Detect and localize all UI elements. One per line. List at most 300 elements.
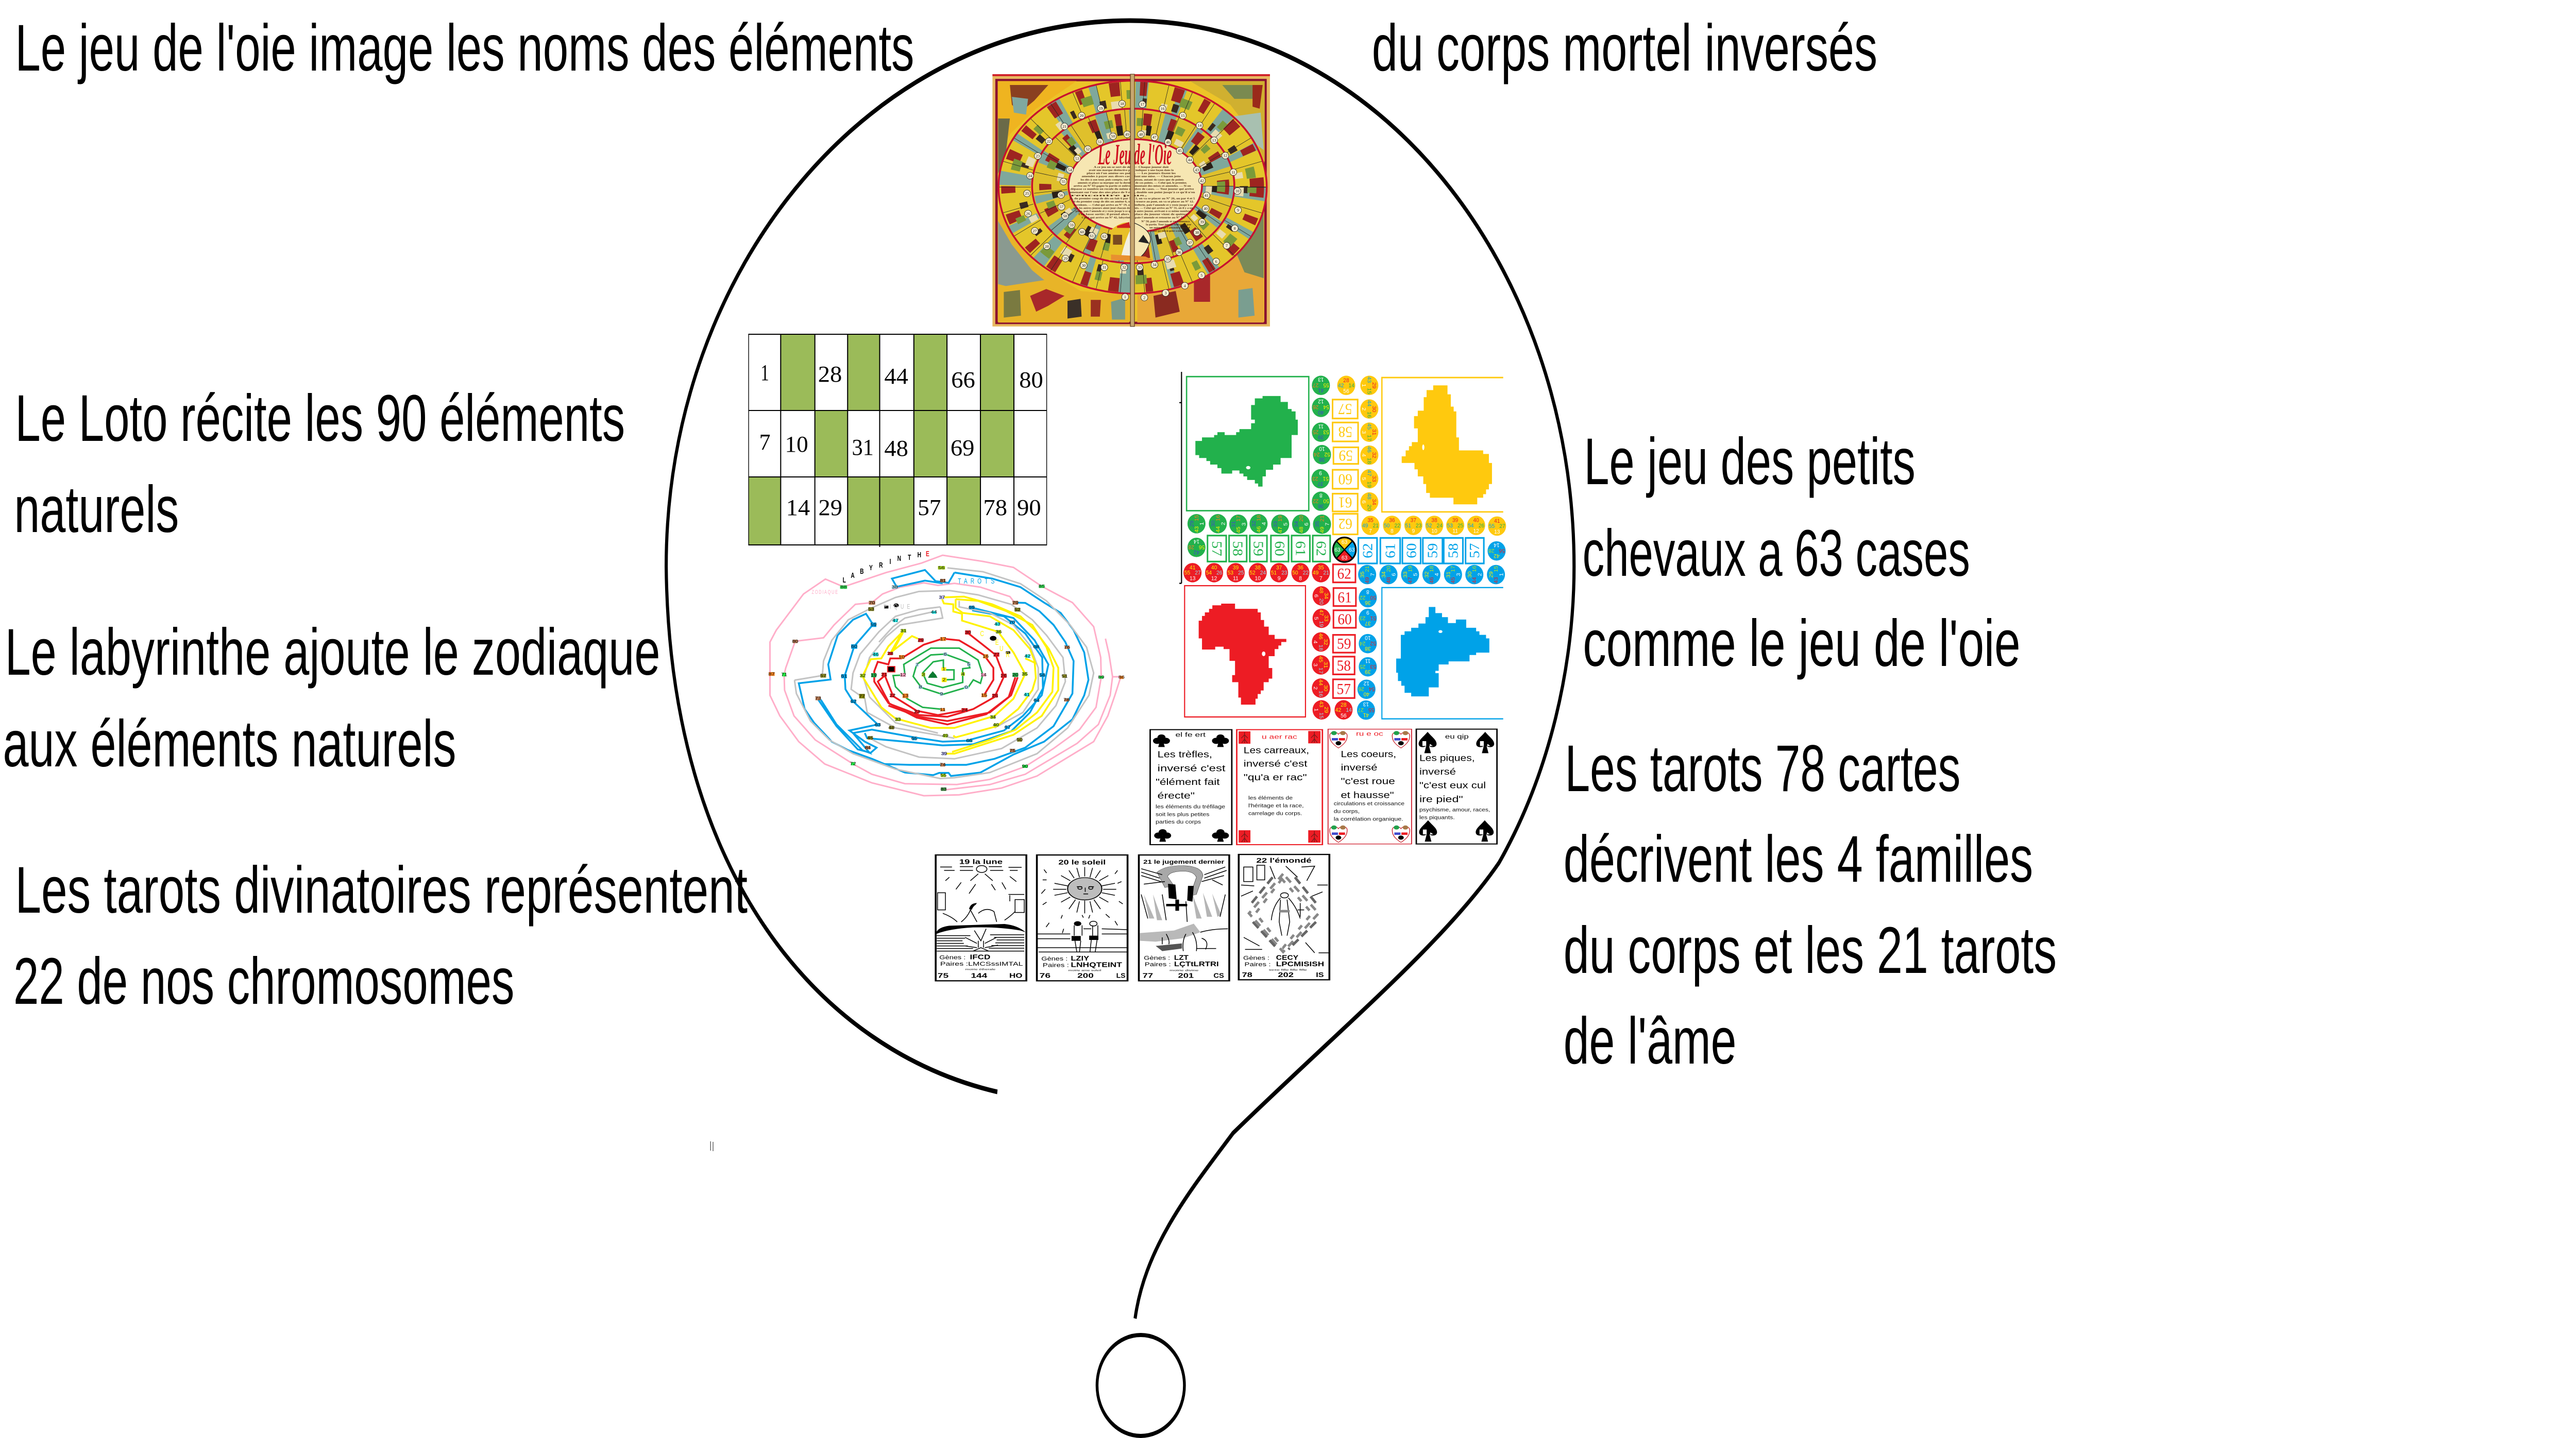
émondé illustration: [1241, 865, 1329, 953]
green tokens: 25: [1313, 429, 1318, 435]
text: jeu de l'oie right: du corps mortel inversés: [1372, 12, 1877, 85]
tarot cards: [936, 854, 1329, 981]
green tokens: 27: [1313, 382, 1318, 388]
board numbered spaces: 30: [1081, 263, 1086, 268]
yellow tokens: 43: [1366, 376, 1372, 383]
labyrinth markers: 11: [940, 708, 945, 712]
board numbered spaces: 19: [1099, 106, 1103, 111]
red tokens: 33: [1323, 615, 1329, 622]
green tokens: 48: [1298, 527, 1304, 533]
blue tokens: 55: [1368, 707, 1374, 713]
green tokens: 18: [1256, 515, 1262, 521]
tarot 20 le soleil: Gènes :: [1041, 956, 1067, 962]
labyrinth markers: 64: [1033, 698, 1040, 703]
labyrinth markers: 67: [1005, 725, 1011, 730]
tarot 21 le jugement dernier: Gènes :: [1144, 955, 1170, 961]
tarot 21 le jugement dernier: 21 le jugement dernier: [1143, 859, 1225, 865]
yellow tokens: [1337, 375, 1506, 536]
card: coeurs: inversé: [1341, 763, 1377, 773]
tarot 21 le jugement dernier: moirie divine: [1170, 969, 1199, 972]
blue numbered squares: [1359, 538, 1484, 563]
blue tokens: 54: [1369, 686, 1375, 692]
blue tokens: 22: [1360, 594, 1365, 601]
card: carreaux: Les carreaux,: [1244, 746, 1309, 756]
labyrinth markers: 62: [850, 699, 857, 704]
board numbered spaces: 46: [1166, 140, 1170, 145]
corner landscape: top right: [1190, 81, 1265, 162]
suit cards: [1150, 729, 1497, 845]
green home: [1187, 376, 1309, 511]
labyrinth markers: 14: [980, 673, 987, 677]
tarot 22 l'émondé: LPCMISISH: [1276, 960, 1324, 968]
green tokens: 39: [1318, 434, 1324, 440]
yellow tokens: 34: [1371, 499, 1377, 505]
green tokens: 43: [1194, 526, 1200, 533]
text: jeu de l'oie left: Le jeu de l'oie image les noms des éléments: [15, 12, 914, 85]
green tokens: 8: [1319, 492, 1323, 499]
labyrinth markers: 7: [916, 663, 919, 667]
yellow numbered squares: 58: [1338, 423, 1352, 440]
labyrinth markers: 37: [939, 595, 945, 600]
blue tokens: 13: [1363, 701, 1369, 707]
board numbered spaces: 18: [1120, 101, 1124, 106]
labyrinth markers: 47: [892, 619, 899, 623]
green tokens: 23: [1312, 475, 1318, 482]
red tokens: 50: [1292, 570, 1298, 576]
card: carreaux: [1237, 730, 1323, 845]
outer ring of squares: [1008, 89, 1257, 286]
red tokens: 6: [1313, 594, 1319, 597]
card: trèfles: érecte": [1158, 791, 1195, 801]
red numbered squares: 61: [1337, 589, 1352, 606]
yellow tokens: 32: [1371, 452, 1377, 458]
labyrinth markers: 89: [1098, 675, 1105, 680]
blue tokens: 25: [1360, 663, 1365, 670]
card: carreaux: les éléments de: [1248, 795, 1293, 801]
yellow tokens: 1: [1361, 384, 1367, 387]
green tokens: 4: [1261, 522, 1267, 525]
board numbered spaces: 10: [1235, 189, 1240, 194]
red tokens: 20: [1318, 598, 1324, 605]
red tokens: 35: [1318, 564, 1324, 571]
board numbered spaces: 58: [1063, 214, 1067, 218]
green tokens: 12: [1318, 398, 1324, 405]
red tokens: 44: [1318, 679, 1324, 686]
yellow tokens: 16: [1366, 412, 1372, 418]
yellow tokens: 47: [1366, 470, 1372, 476]
tarot 21 le jugement dernier: 77: [1143, 971, 1153, 979]
tarot 19 la lune: 19 la lune: [959, 858, 1003, 866]
tarot 20 le soleil: LNHQTEINT: [1071, 961, 1122, 969]
green tokens: 29: [1189, 521, 1195, 527]
yellow tokens: 20: [1366, 505, 1372, 511]
green numbered squares: 62: [1313, 541, 1329, 556]
yellow tokens: 49: [1362, 522, 1368, 529]
card: piques: "c'est eux cul: [1419, 781, 1486, 791]
labyrinth markers: 0: [964, 685, 968, 690]
blue tokens: 27: [1358, 707, 1364, 713]
green tokens: 21: [1319, 516, 1325, 522]
labyrinth markers: 17: [940, 637, 946, 642]
green tokens: 51: [1323, 475, 1329, 482]
red tokens: 8: [1299, 575, 1302, 582]
red tokens: 7: [1319, 575, 1323, 582]
board numbered spaces: 42: [1200, 178, 1204, 183]
labyrinth markers: 43: [994, 622, 1001, 627]
blue tokens: 24: [1360, 640, 1365, 646]
heart icons: [1330, 731, 1410, 843]
loto numbers: 14: [786, 495, 810, 521]
red tokens: 13: [1190, 575, 1195, 582]
green numbered squares: 60: [1272, 541, 1287, 556]
board numbered spaces: 12: [1223, 153, 1227, 158]
thought bubble outline: [666, 21, 1574, 1319]
yellow numbered squares: 62: [1338, 515, 1352, 532]
green numbered squares: 61: [1293, 541, 1308, 556]
yellow tokens: 40: [1473, 517, 1479, 524]
text: petits chevaux: [1583, 425, 2021, 680]
red tokens: 23: [1281, 570, 1287, 576]
blue tokens: 31: [1446, 571, 1451, 578]
blue tokens: 20: [1386, 566, 1392, 572]
labyrinth markers: 57: [820, 674, 826, 678]
green tokens: 53: [1323, 429, 1329, 435]
labyrinth word: COEUR: C: [980, 629, 984, 638]
board rules paragraph: que les autres joueurs aient joué chacun deux fois. — Celui qui arrive au N° 31, où il y a un: [1074, 206, 1193, 210]
blue tokens: 50: [1370, 594, 1376, 601]
labyrinth markers: [769, 566, 1125, 792]
board numbered spaces: 33: [1138, 265, 1142, 270]
red tokens: 10: [1255, 575, 1261, 582]
card: trèfles: Les trèfles,: [1158, 750, 1212, 760]
yellow tokens: 24: [1437, 522, 1443, 529]
red tokens: 31: [1323, 662, 1329, 668]
small bubble circle: [1097, 1335, 1184, 1436]
tarot 22 l'émondé: CECY: [1276, 953, 1299, 961]
card: carreaux: "qu'a er rac": [1244, 773, 1307, 782]
blue tokens: 43: [1493, 577, 1499, 584]
loto numbers: 7: [759, 430, 770, 455]
loto numbers: 31: [852, 435, 874, 460]
stray tick marks: [710, 1141, 713, 1151]
board numbered spaces: 56: [1059, 193, 1063, 197]
board numbered spaces: 1: [1124, 295, 1126, 299]
text: tarots 78 cartes: du corps et les 21 tarots: [1564, 914, 2057, 987]
red tokens: 55: [1184, 570, 1190, 576]
red tokens: 24: [1260, 570, 1266, 576]
labyrinth markers: 59: [870, 623, 877, 627]
tarot 22 l'émondé: 78: [1242, 971, 1252, 979]
labyrinth markers: 31: [901, 629, 907, 634]
text: labyrinthe: aux éléments naturels: [3, 708, 456, 781]
blue tokens: 8: [1366, 589, 1369, 595]
labyrinth markers: 35: [1022, 672, 1028, 677]
green tokens: 1: [1199, 522, 1205, 525]
red tokens: 46: [1318, 633, 1324, 640]
green tokens: 54: [1323, 404, 1329, 410]
green tokens: 28: [1188, 544, 1194, 550]
blue tokens: 28: [1488, 547, 1494, 554]
yellow tokens: 19: [1366, 481, 1372, 488]
red tokens: 39: [1233, 564, 1239, 571]
loto numbers: 66: [951, 367, 975, 393]
red tokens: 51: [1271, 570, 1277, 576]
blue tokens: 52: [1370, 640, 1376, 646]
labyrinth markers: 42: [1024, 654, 1031, 659]
labyrinth markers: 29: [918, 638, 924, 643]
red tokens: 48: [1318, 587, 1324, 593]
card: trèfles: [1150, 730, 1232, 845]
green tokens: 5: [1283, 523, 1289, 526]
yellow tokens: 48: [1366, 493, 1372, 500]
labyrinth markers: 8: [919, 685, 922, 690]
text: petits chevaux: comme le jeu de l'oie: [1583, 607, 2021, 680]
labyrinth markers: 88: [840, 585, 846, 590]
blue tokens: 37: [1365, 620, 1371, 626]
labyrinth markers: 33: [895, 717, 901, 722]
labyrinth markers: 77: [859, 694, 865, 699]
board numbered spaces: 17: [1140, 102, 1144, 107]
yellow tokens: 14: [1349, 383, 1354, 389]
yellow numbered squares: [1333, 400, 1359, 535]
tarot 19 la lune: 144: [971, 971, 988, 979]
tarot 19 la lune: 75: [938, 971, 949, 979]
blue tokens: 7: [1370, 573, 1376, 576]
loto numbers: 28: [818, 362, 842, 387]
green tokens: 32: [1251, 521, 1257, 527]
labyrinth markers: 27: [993, 653, 999, 657]
labyrinth word: COEUR: E: [995, 638, 999, 647]
blue tokens: 17: [1450, 566, 1456, 572]
blue tokens: 41: [1363, 712, 1369, 718]
yellow tokens: 23: [1416, 522, 1421, 529]
card: piques: eu qip: [1445, 733, 1469, 740]
labyrinth markers: 34: [990, 715, 996, 720]
board rules paragraph: rencontre plus.: [1071, 194, 1149, 197]
yellow tokens: 27: [1499, 523, 1505, 529]
labyrinth markers: 79: [1012, 601, 1019, 605]
board numbered spaces: 50: [1111, 134, 1115, 139]
red tokens: 36: [1297, 564, 1303, 571]
yellow tokens: 36: [1389, 517, 1395, 524]
labyrinth markers: 73: [815, 696, 821, 701]
red tokens: 19: [1318, 621, 1324, 627]
labyrinth markers: 68: [1033, 645, 1040, 649]
board numbered spaces: 36: [1177, 250, 1181, 254]
card: trèfles: les éléments du tréfilage: [1156, 804, 1225, 810]
board numbered spaces: 13: [1212, 138, 1216, 143]
red tokens: 43: [1318, 701, 1324, 707]
card: carreaux: l'héritage et la race,: [1248, 803, 1304, 809]
yellow tokens: 46: [1366, 447, 1372, 453]
goose vignette: [1109, 222, 1154, 261]
card: trèfles: "élément fait: [1156, 777, 1220, 787]
board numbered spaces: 47: [1153, 135, 1157, 140]
loto numbers: 69: [951, 435, 974, 461]
card: coeurs: [1328, 729, 1412, 844]
red numbered squares: 60: [1337, 611, 1352, 628]
board numbered spaces: 48: [1139, 132, 1143, 136]
labyrinth paths: [770, 555, 1121, 796]
labyrinth markers: 46: [873, 653, 879, 657]
labyrinth markers: 52: [1014, 608, 1021, 612]
labyrinth markers: 70: [869, 601, 875, 605]
blue tokens: 11: [1365, 658, 1370, 664]
moon illustration: [936, 866, 1026, 951]
labyrinth markers: 26: [1001, 674, 1007, 678]
yellow tokens: 42: [1338, 383, 1344, 389]
centre dice wheel: 63: [1349, 547, 1354, 553]
red tokens: 38: [1255, 564, 1261, 571]
yellow tokens: 29: [1371, 382, 1377, 388]
labyrinth word: LABYRINTHE: E: [926, 549, 929, 558]
board rules paragraph: un autre paie l'amende et prend: [1149, 227, 1190, 230]
blue tokens: 34: [1381, 571, 1387, 578]
text: petits chevaux: chevaux a 63 cases: [1583, 517, 1970, 590]
green tokens: 45: [1235, 527, 1242, 533]
card: coeurs: et hausse": [1341, 790, 1394, 800]
labyrinth word: COEUR: [980, 629, 1010, 659]
green tokens: 7: [1325, 523, 1331, 526]
petits chevaux board: [1179, 372, 1506, 720]
yellow tokens: 45: [1366, 423, 1372, 430]
red numbered squares: 57: [1337, 681, 1351, 698]
red tokens: 15: [1318, 712, 1324, 718]
yellow tokens: 52: [1426, 522, 1432, 529]
labyrinth markers: 22: [889, 693, 895, 698]
labyrinth markers: 80: [792, 639, 799, 644]
yellow tokens: 30: [1371, 406, 1377, 412]
board numbered spaces: 37: [1188, 241, 1192, 245]
red tokens: 1: [1313, 708, 1319, 711]
green tokens: 11: [1318, 423, 1324, 430]
labyrinth word: LABYRINTHE: H: [918, 550, 921, 559]
card: trèfles: parties du corps: [1156, 819, 1201, 825]
labyrinth markers: 48: [888, 726, 894, 730]
green numbered squares: 59: [1250, 541, 1266, 556]
text: loto: Le Loto récite les 90 éléments: [15, 382, 625, 455]
loto numbers: 29: [818, 495, 842, 521]
labyrinth markers: 60: [851, 644, 857, 649]
red tokens: 4: [1312, 640, 1318, 644]
club icons: [1153, 734, 1229, 842]
board numbered spaces: 44: [1188, 158, 1192, 162]
red tokens: 41: [1190, 564, 1195, 571]
labyrinth markers: 4: [961, 672, 965, 677]
green tokens: 47: [1278, 527, 1283, 533]
card: piques: psychisme, amour, races,: [1419, 807, 1490, 813]
blue tokens: 16: [1471, 566, 1478, 572]
board numbered spaces: 21: [1062, 124, 1066, 129]
red ring lines: [998, 81, 1267, 294]
card: piques: inversé: [1419, 767, 1456, 777]
green tokens: 30: [1210, 521, 1216, 527]
board rules paragraph: arrive au N° 63 gagne la partie et enlève le montant des mises et amendes. — Si on: [1074, 184, 1191, 188]
board rules paragraph: amendes à payer aux divers cas et font une mise. — Chacun jette: [1081, 175, 1181, 178]
board numbered spaces: 32: [1122, 265, 1126, 270]
green tokens: [1188, 375, 1331, 557]
labyrinth markers: 3: [922, 673, 925, 677]
blue tokens: 53: [1370, 663, 1376, 670]
green tokens: 22: [1313, 498, 1318, 504]
green numbered squares: 57: [1209, 541, 1224, 556]
labyrinth word: LABYRINTHE: I: [890, 557, 891, 566]
yellow tokens: 12: [1473, 528, 1479, 535]
tarot 21 le jugement dernier: [1139, 855, 1229, 981]
loto numbers: 90: [1017, 495, 1041, 521]
board rules paragraph: place où l'on amène ses points. — Les joueurs fixent les: [1087, 172, 1176, 175]
red tokens: 14: [1346, 707, 1352, 713]
yellow tokens: 33: [1371, 475, 1377, 482]
red numbered squares: 59: [1337, 636, 1351, 653]
yellow tokens: 41: [1494, 518, 1500, 524]
blue tokens: 6: [1391, 573, 1397, 576]
board numbered spaces: 29: [1063, 256, 1067, 261]
yellow tokens: 9: [1412, 528, 1415, 535]
blue tokens: 35: [1360, 571, 1366, 578]
green tokens: 2: [1221, 522, 1226, 525]
card: coeurs: circulations et croissance: [1334, 801, 1404, 807]
yellow tokens: 35: [1367, 517, 1374, 524]
blue tokens: 26: [1358, 686, 1364, 692]
board numbered spaces: 20: [1080, 113, 1084, 118]
labyrinth markers: 21: [881, 673, 887, 677]
board rules paragraph: la partie. Tout joueur rencontré par: [1146, 224, 1192, 227]
yellow tokens: 2: [1361, 407, 1367, 410]
red tokens: 9: [1278, 575, 1281, 582]
green tokens: 42: [1194, 549, 1199, 556]
labyrinth markers: 85: [1039, 584, 1045, 589]
blue tokens: 29: [1488, 571, 1495, 578]
board numbered spaces: 28: [1045, 244, 1049, 249]
labyrinth markers: 49: [942, 733, 948, 738]
yellow tokens: 44: [1366, 400, 1372, 406]
blue tokens: 21: [1364, 566, 1370, 572]
blue tokens: 45: [1450, 577, 1456, 584]
labyrinth markers: 84: [865, 746, 871, 750]
red tokens: 18: [1318, 644, 1324, 651]
card: coeurs: ru e oc: [1356, 730, 1383, 738]
labyrinth markers: 44: [931, 610, 938, 614]
board numbered spaces: 34: [1153, 263, 1157, 267]
yellow tokens: 18: [1366, 458, 1372, 464]
yellow tokens: 51: [1405, 522, 1411, 529]
tarot 21 le jugement dernier: CS: [1213, 971, 1224, 979]
yellow tokens: 28: [1343, 377, 1349, 384]
card: coeurs: la corrélation organique.: [1334, 816, 1403, 822]
goose game board image: Le Jeu de l'Oie: [1098, 138, 1172, 171]
tarot 22 l'émondé: sexe fille fille fille: [1269, 969, 1308, 971]
tarot 20 le soleil: 20 le soleil: [1058, 858, 1106, 866]
tarot 20 le soleil: moirie ame soleil: [1069, 969, 1101, 972]
labyrinth markers: 12: [900, 673, 906, 677]
red tokens: 45: [1318, 656, 1324, 662]
card: piques: Les piques,: [1419, 753, 1475, 763]
labyrinth markers: 41: [1024, 693, 1030, 697]
board numbered spaces: 49: [1125, 132, 1129, 136]
board rules paragraph: Accidents. — Celui qui arrive au N° 19, à l'hôtellerie, paie l'amende et y reste jusqu'à ce: [1074, 203, 1193, 207]
spade icons: [1419, 732, 1494, 842]
yellow tokens: 37: [1411, 517, 1416, 524]
labyrinth markers: 28: [887, 652, 893, 656]
red tokens: 25: [1238, 570, 1244, 576]
green tokens: 38: [1319, 456, 1325, 463]
yellow tokens: 10: [1431, 528, 1437, 535]
blue tokens: 9: [1366, 609, 1369, 615]
blue tokens: 23: [1360, 615, 1365, 621]
tarot 19 la lune: HO: [1009, 971, 1023, 979]
board rules paragraph: [1070, 166, 1195, 233]
